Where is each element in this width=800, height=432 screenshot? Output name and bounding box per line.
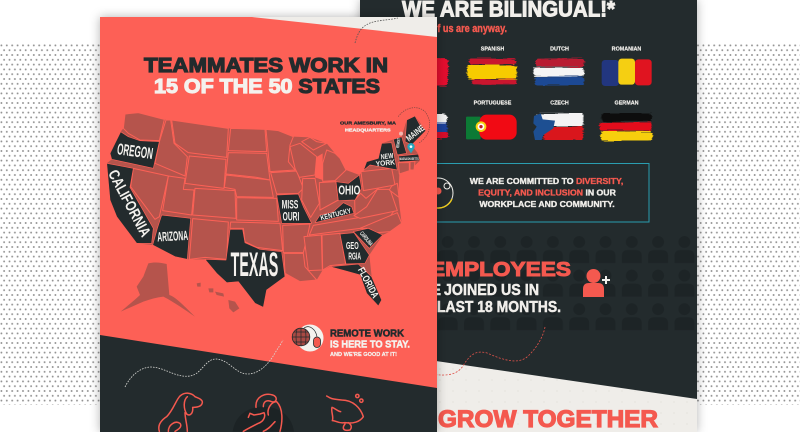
- title line 1: TEAMMATES WORK IN: [144, 54, 388, 77]
- state: california: CALIFORNIA: [104, 167, 154, 240]
- state: florida: [330, 264, 382, 306]
- state: arizona: ARIZONA: [157, 228, 189, 244]
- new employees heading: EMPLOYEES: [430, 258, 571, 281]
- dashed connector on left page: [125, 340, 283, 387]
- subheading: Most of us are anyway.: [408, 23, 507, 35]
- icon: cat: [243, 394, 282, 431]
- diversity statement: [470, 176, 623, 209]
- state: maine: MAINE: [404, 123, 426, 143]
- flag: russian partial: [427, 114, 448, 138]
- flag: dutch: [533, 59, 584, 85]
- state: georgia: [340, 233, 369, 264]
- new employees text: the last 18 months: LAST 18 MONTHS.: [437, 299, 561, 316]
- label: czech: CZECH: [550, 100, 569, 106]
- state: new york: YORK: [375, 157, 396, 168]
- state: ohio: OHIO: [338, 183, 360, 198]
- cream corner wedge: [252, 17, 437, 37]
- line 3: WORKPLACE AND COMMUNITY.: [479, 199, 615, 209]
- flag: italian partial: [427, 59, 448, 86]
- right page shadow: [360, 0, 697, 432]
- label: spanish: SPANISH: [481, 46, 504, 52]
- flags: [427, 59, 653, 141]
- new employees text: have: HAVE: [398, 282, 441, 299]
- icon: globe and mouse: [292, 324, 324, 352]
- icon: dog: [159, 393, 202, 431]
- state: missouri: OURI: [283, 210, 299, 224]
- state: vermont and new hampshire: VERMONT: [395, 138, 401, 148]
- state: texas: [205, 229, 285, 307]
- coral page background: [100, 17, 437, 432]
- dark page background: [360, 0, 697, 432]
- title: [144, 54, 388, 98]
- flag: german: [599, 113, 653, 141]
- pet icons: [159, 393, 363, 432]
- headquarters label line 2: HEADQUARTERS: [345, 127, 391, 132]
- state: ohio: [336, 175, 362, 201]
- headquarters dashed ring: [398, 108, 430, 143]
- flag: spanish: [467, 59, 517, 84]
- line 2: IS HERE TO STAY.: [330, 340, 410, 351]
- dark footer band: [100, 335, 437, 432]
- cream footer: [437, 361, 697, 432]
- line 3: AND WE'RE GOOD AT IT!: [330, 352, 397, 358]
- line 1: REMOTE WORK: [330, 328, 405, 340]
- icon: add person: [583, 269, 610, 297]
- cat shadow: [233, 407, 294, 432]
- other states: [123, 113, 415, 282]
- label: german: GERMAN: [615, 100, 639, 106]
- state: vermont and new hampshire: [393, 137, 407, 155]
- flag: portuguese: [466, 115, 517, 140]
- remote work text: [330, 328, 410, 358]
- state: california: [104, 163, 154, 243]
- hawaii: [197, 283, 239, 312]
- state: oregon: [110, 132, 159, 168]
- state: missouri: MISS: [282, 197, 298, 211]
- dashed connector on right page: [430, 327, 545, 375]
- line 2: EQUITY, AND INCLUSION IN OUR: [478, 188, 617, 198]
- state: oregon: OREGON: [116, 141, 154, 163]
- label: dutch: DUTCH: [550, 46, 569, 52]
- label: romanian: ROMANIAN: [612, 46, 641, 52]
- state: georgia: GEO: [346, 241, 359, 252]
- label: portuguese: PORTUGUESE: [474, 100, 512, 106]
- state: kentucky: KENTUCKY: [319, 206, 352, 222]
- panel: left page: [100, 17, 437, 432]
- icon: fish: [327, 394, 363, 430]
- diversity callout box: [420, 164, 649, 222]
- alaska: [121, 262, 195, 317]
- headquarters label: OUR AMESBURY, MA: [340, 121, 397, 126]
- panel: right page: [437, 361, 697, 432]
- map: united states: TEXAS: [231, 246, 278, 284]
- map: united states: [104, 108, 430, 317]
- flag: romanian: [602, 59, 652, 86]
- small marker: [399, 132, 403, 136]
- new employees text: joined us in: JOINED US IN: [444, 282, 539, 299]
- location pin: [407, 143, 415, 153]
- state: massachusetts: [398, 154, 420, 162]
- dashed connector in wedge: [355, 18, 398, 43]
- line 1: WE ARE COMMITTED TO DIVERSITY,: [470, 176, 623, 186]
- people pattern: [434, 233, 698, 334]
- state: new york: [363, 143, 397, 171]
- title line 2: 15 OF THE 50 STATES: [154, 75, 380, 98]
- flag labels: [474, 46, 641, 106]
- lower 48 silhouette: [107, 113, 426, 307]
- state: south carolina: [353, 228, 383, 248]
- state: south carolina: CAROLINA: [358, 231, 374, 248]
- lake michigan: [315, 153, 323, 180]
- state: georgia: RGIA: [348, 251, 361, 262]
- state: arizona: [153, 215, 191, 259]
- flag: czech: [533, 113, 583, 140]
- state: massachusetts: MASSACHUSETTS: [399, 157, 419, 161]
- icon: diversity circle: [423, 178, 453, 208]
- state: florida: FLORIDA: [355, 266, 380, 300]
- state: new york: NEW: [380, 151, 394, 161]
- state: missouri: [277, 194, 312, 224]
